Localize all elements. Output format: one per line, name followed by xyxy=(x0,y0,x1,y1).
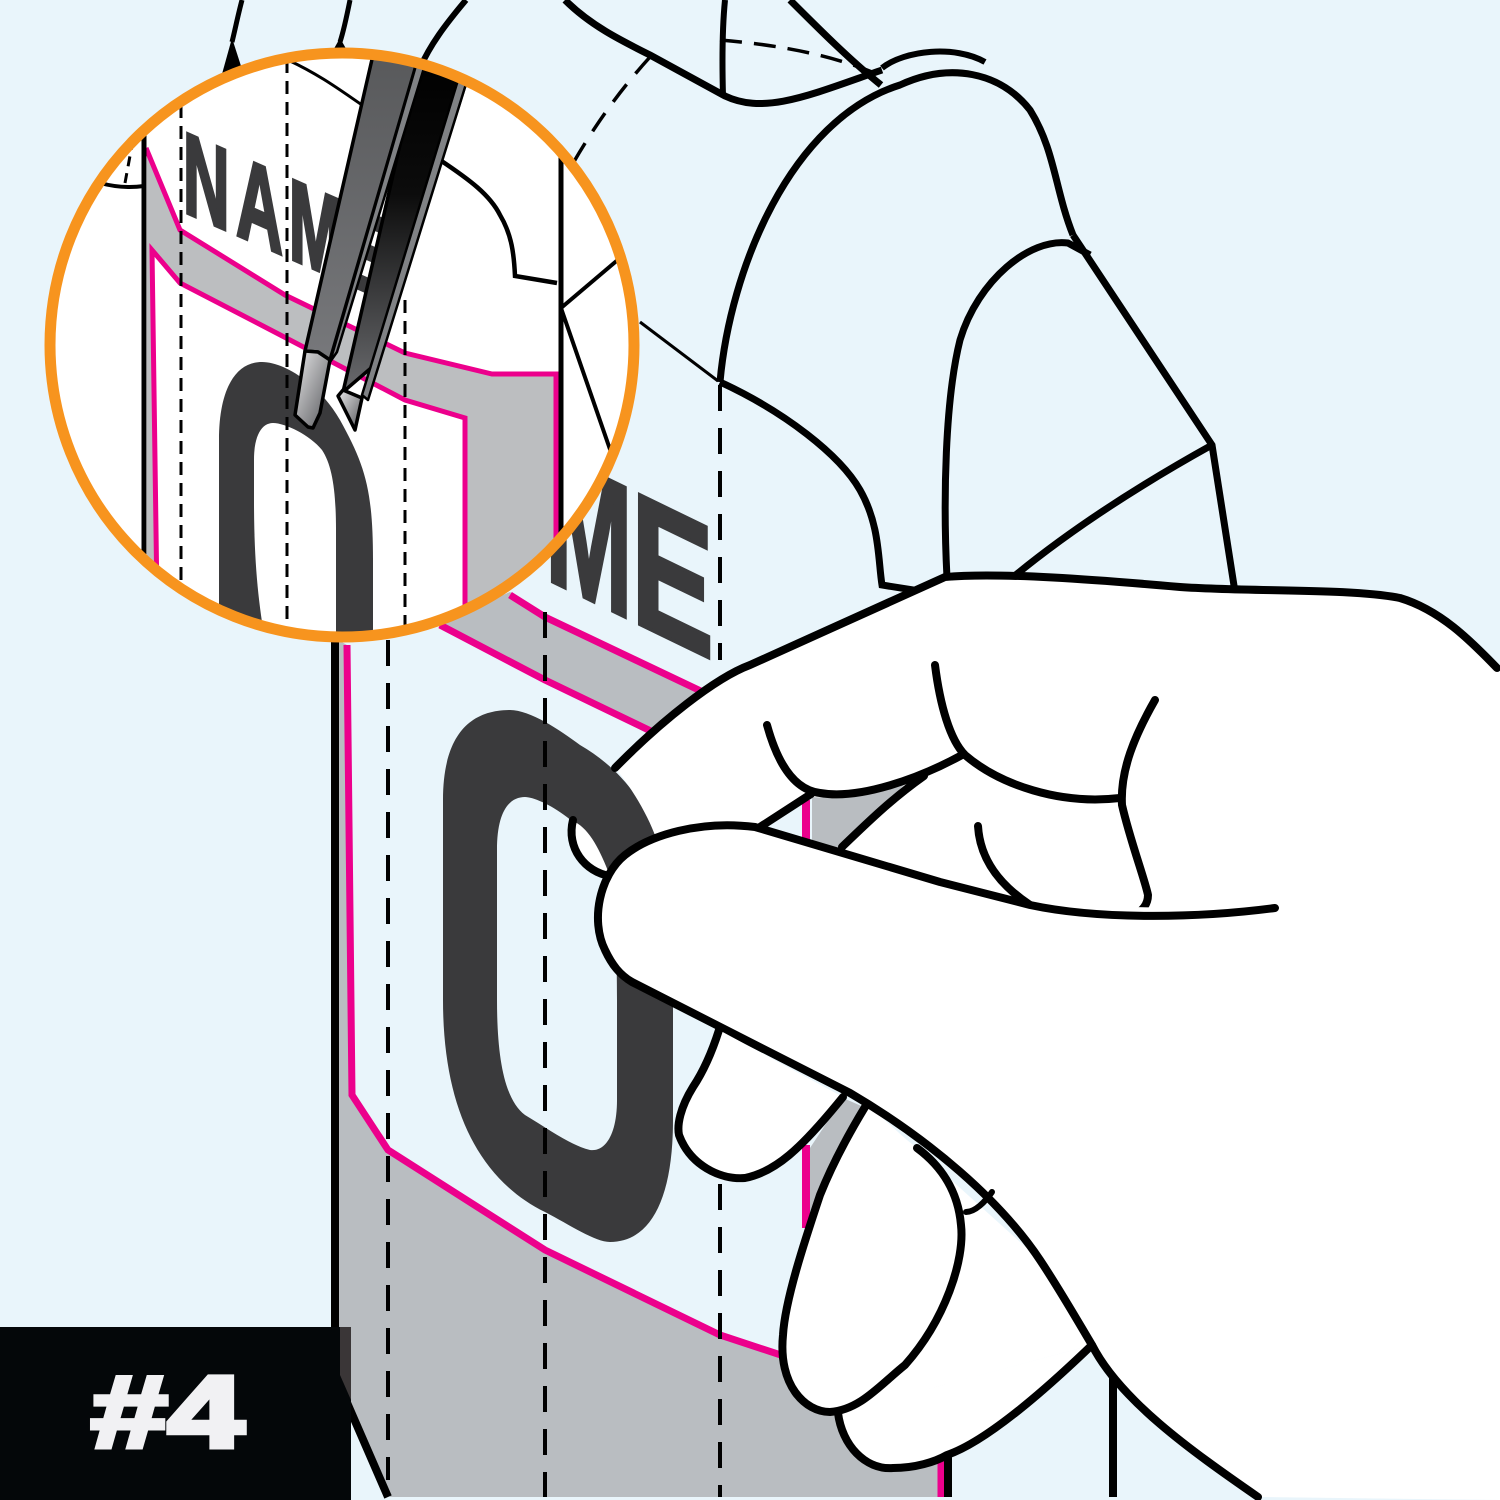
inset ring xyxy=(50,53,634,637)
jersey name text xyxy=(545,409,714,700)
inset contents xyxy=(100,55,620,640)
grey sliver between fingers xyxy=(810,1098,866,1225)
thumb xyxy=(598,824,1280,1100)
tweezer left tip xyxy=(295,351,330,428)
inset grey trim xyxy=(147,150,556,640)
jersey hem grey xyxy=(338,640,945,1497)
overlap on jersey xyxy=(340,1327,351,1400)
lower finger small xyxy=(678,1030,843,1178)
dashed fold guides xyxy=(388,385,720,1497)
jersey name text: M xyxy=(545,409,633,661)
inset background xyxy=(50,53,634,637)
inset name text: NAME xyxy=(183,108,388,327)
step number: #4 xyxy=(91,1354,244,1469)
inset number zero xyxy=(219,362,373,640)
jersey collar band grey xyxy=(440,592,705,735)
lower finger bottom xyxy=(838,1345,1092,1468)
inset dashed guides xyxy=(181,60,405,635)
jersey name text: E xyxy=(631,450,714,700)
index finger creases xyxy=(767,725,962,794)
back of hand xyxy=(598,575,1500,1500)
pink trim lines xyxy=(347,595,941,1497)
lower finger large xyxy=(782,1107,962,1412)
gap behind fingers xyxy=(760,795,812,846)
jersey side seams xyxy=(335,640,1113,1497)
inset pink lines xyxy=(146,148,556,640)
inset jersey lines xyxy=(100,60,620,570)
tweezer right arm xyxy=(343,62,466,392)
hand xyxy=(572,575,1500,1500)
tweezer right tip xyxy=(338,390,362,430)
number zero xyxy=(443,710,673,1242)
tweezers xyxy=(295,55,466,430)
knuckle tick xyxy=(966,1192,992,1212)
hand outline xyxy=(615,575,1497,768)
palm below thumb xyxy=(840,1105,1092,1413)
tweezer left arm xyxy=(305,55,417,360)
badge panel xyxy=(0,1327,351,1500)
step badge xyxy=(0,1327,351,1500)
magnified inset xyxy=(50,53,634,640)
jersey upper lines xyxy=(222,0,1235,595)
zero lifted corner xyxy=(572,820,610,876)
